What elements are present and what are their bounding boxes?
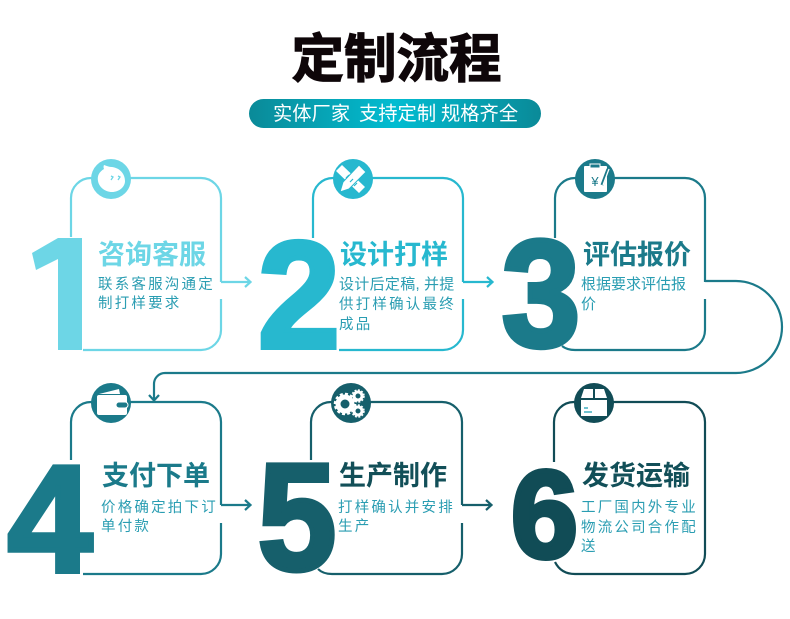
description 2: 供打样确认最终 [339,296,456,313]
panel: step 5 production [258,383,492,603]
icon: chat bubble [91,159,131,199]
description 6: 送 [581,538,598,555]
arrow to step 5 [221,500,250,510]
card outline 6 [554,402,705,574]
arrow to step 6 [462,500,492,510]
description 2: 设计后定稿, [339,276,420,293]
connector to step 4 [149,281,782,400]
description 2: 并提 [424,276,455,293]
description 6 [581,499,698,555]
heading 2: 设计打样 [340,240,448,270]
icon: quotation clipboard: ¥ [590,174,599,189]
description 6: 物流公司合作配 [581,519,698,536]
icon: ruler and pencil [333,159,373,199]
heading 4: 支付下单 [102,461,210,491]
card outline 5 [311,402,462,574]
card outline 4 [71,402,221,574]
panel: step 6 shipping [511,383,705,584]
icon: wallet [91,383,131,423]
card outline 3 [555,178,705,350]
description 1 [98,276,215,312]
description 2: 成品 [339,316,372,333]
description 5: 生产 [338,518,371,535]
subtitle pill [249,99,541,128]
icon: quotation clipboard [575,159,615,199]
description 4: 单付款 [101,518,151,535]
numeral 4: 4 [8,434,92,604]
description 5 [338,499,455,535]
icon: parcel box [574,383,614,423]
heading 1: 咨询客服 [98,240,206,270]
description 4: 价格确定拍下订 [101,499,218,516]
subtitle pill: 实体厂家 [273,103,350,125]
title: 定制流程 [291,30,502,89]
arrow to step 2 [221,277,250,287]
heading 6: 发货运输 [582,461,690,491]
card outline 2 [313,178,463,350]
description 5: 打样确认并安排 [338,499,455,516]
description 3 [581,276,686,313]
arrow to step 3 [463,277,492,287]
panel: step 2 design [258,159,492,380]
numeral 1 [32,238,82,350]
numeral 2: 2 [258,209,340,380]
panel: step 3 quote [149,159,782,400]
numeral 3: 3 [502,209,580,379]
description 6: 工厂国内外专业 [581,499,698,516]
numeral 5: 5 [258,433,336,603]
heading 3: 评估报价 [583,240,691,270]
numeral 6: 6 [511,445,578,584]
subtitle pill: 规格齐全 [441,103,518,125]
description 1: 制打样要求 [98,295,182,312]
card outline 1 [71,178,221,350]
description 3: 价 [581,296,596,313]
description 1: 联系客服沟通定 [98,276,215,293]
description 4 [101,499,218,535]
panel: step 1 consult [32,159,252,352]
description 3: 根据要求评估报 [581,276,686,293]
description 2 [339,276,456,333]
subtitle pill: 支持定制 [359,103,436,125]
numeral 1: 1 [27,210,113,384]
panel: step 4 payment [8,383,250,604]
icon: gears [331,383,371,423]
heading 5: 生产制作 [339,461,447,491]
